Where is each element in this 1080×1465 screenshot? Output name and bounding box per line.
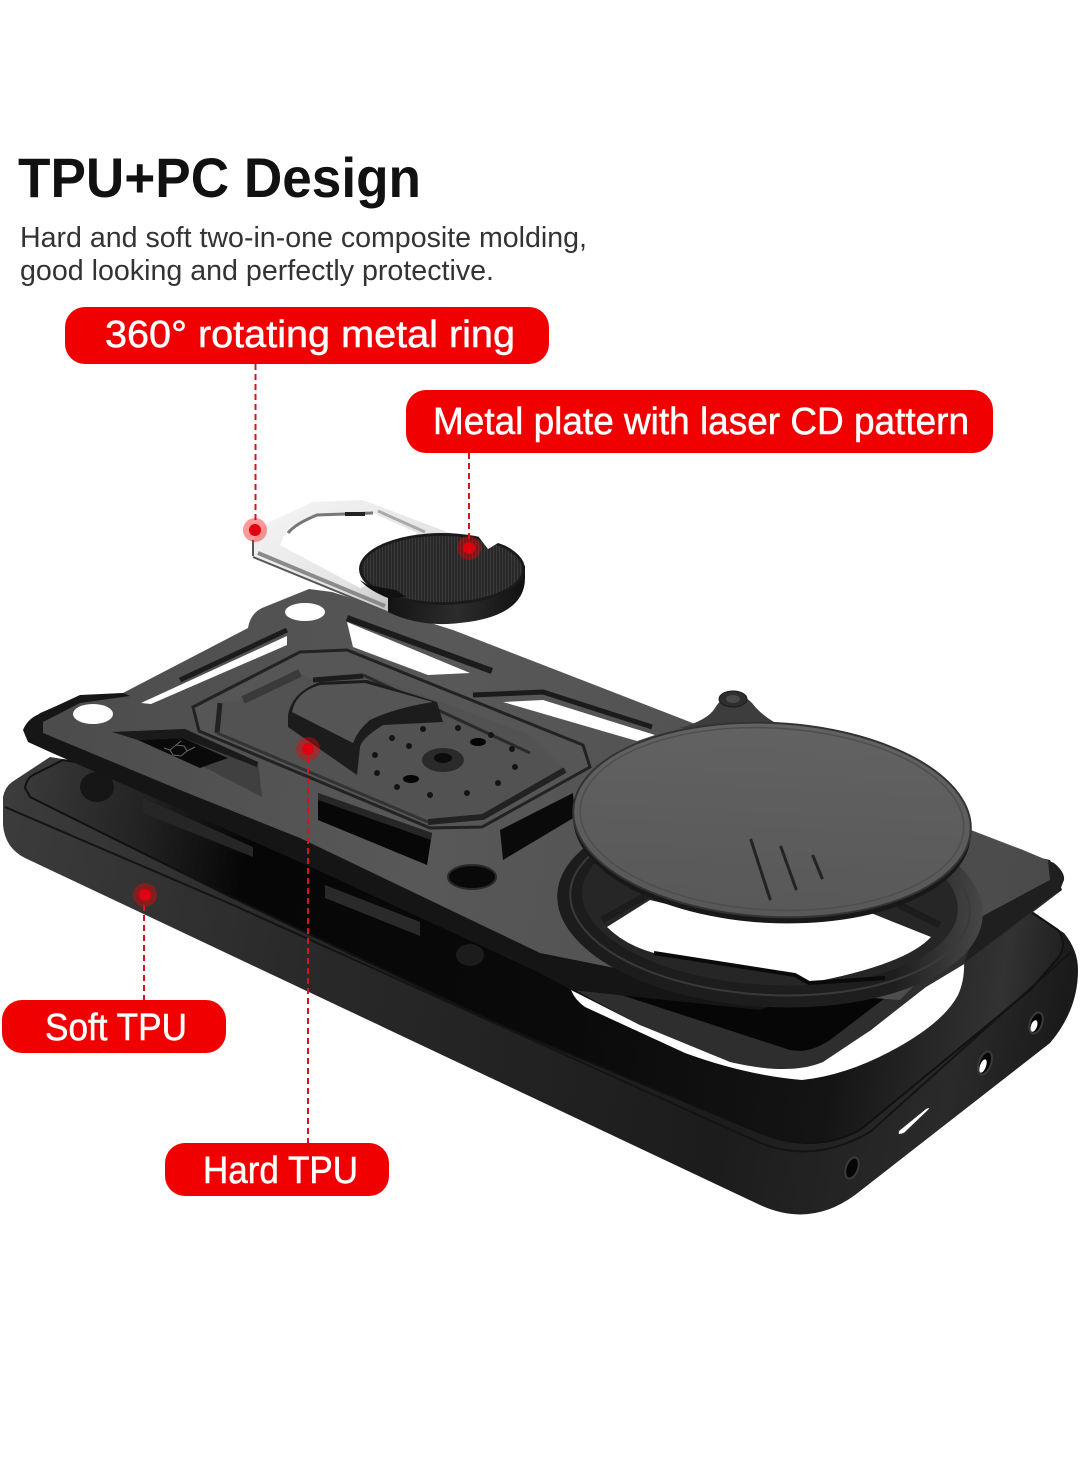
plate recesses (112, 729, 575, 865)
title: TPU+PC Design (18, 146, 421, 209)
white gap through the frame (571, 960, 964, 1080)
callout: hard TPU (165, 737, 389, 1196)
octagonal centre (193, 650, 590, 828)
metal plate disc (359, 530, 525, 624)
product: exploded phone case (3, 500, 1078, 1214)
callout: 360 rotating metal ring (65, 307, 549, 542)
port holes (843, 1011, 1045, 1180)
description text (20, 222, 587, 287)
sliding lens cover (568, 713, 976, 933)
interior clips and pins (80, 772, 484, 966)
callout: soft TPU: Soft TPU (45, 1007, 187, 1049)
callout: hard TPU: Hard TPU (203, 1150, 358, 1192)
lens cover tab (680, 691, 790, 730)
plate underside (540, 850, 1062, 1069)
plate cut-outs (73, 603, 655, 741)
mount screw holes (372, 725, 518, 798)
camera ring (552, 792, 988, 1018)
description text: Hard and soft two-in-one composite molding, (20, 222, 587, 254)
callout: soft TPU (2, 883, 226, 1053)
callout: 360 rotating metal ring: 360° rotating metal ring (105, 314, 515, 356)
plate grooves (180, 618, 652, 727)
callout: metal plate with laser CD pattern: Metal plate with laser CD pattern (433, 401, 969, 443)
hard plate (23, 589, 1064, 1010)
ring mount half disc (288, 680, 443, 775)
metal ring holder (253, 500, 455, 612)
description text: good looking and perfectly protective. (20, 255, 494, 287)
soft TPU frame (3, 757, 1078, 1214)
callout: metal plate with laser CD pattern (406, 390, 993, 560)
